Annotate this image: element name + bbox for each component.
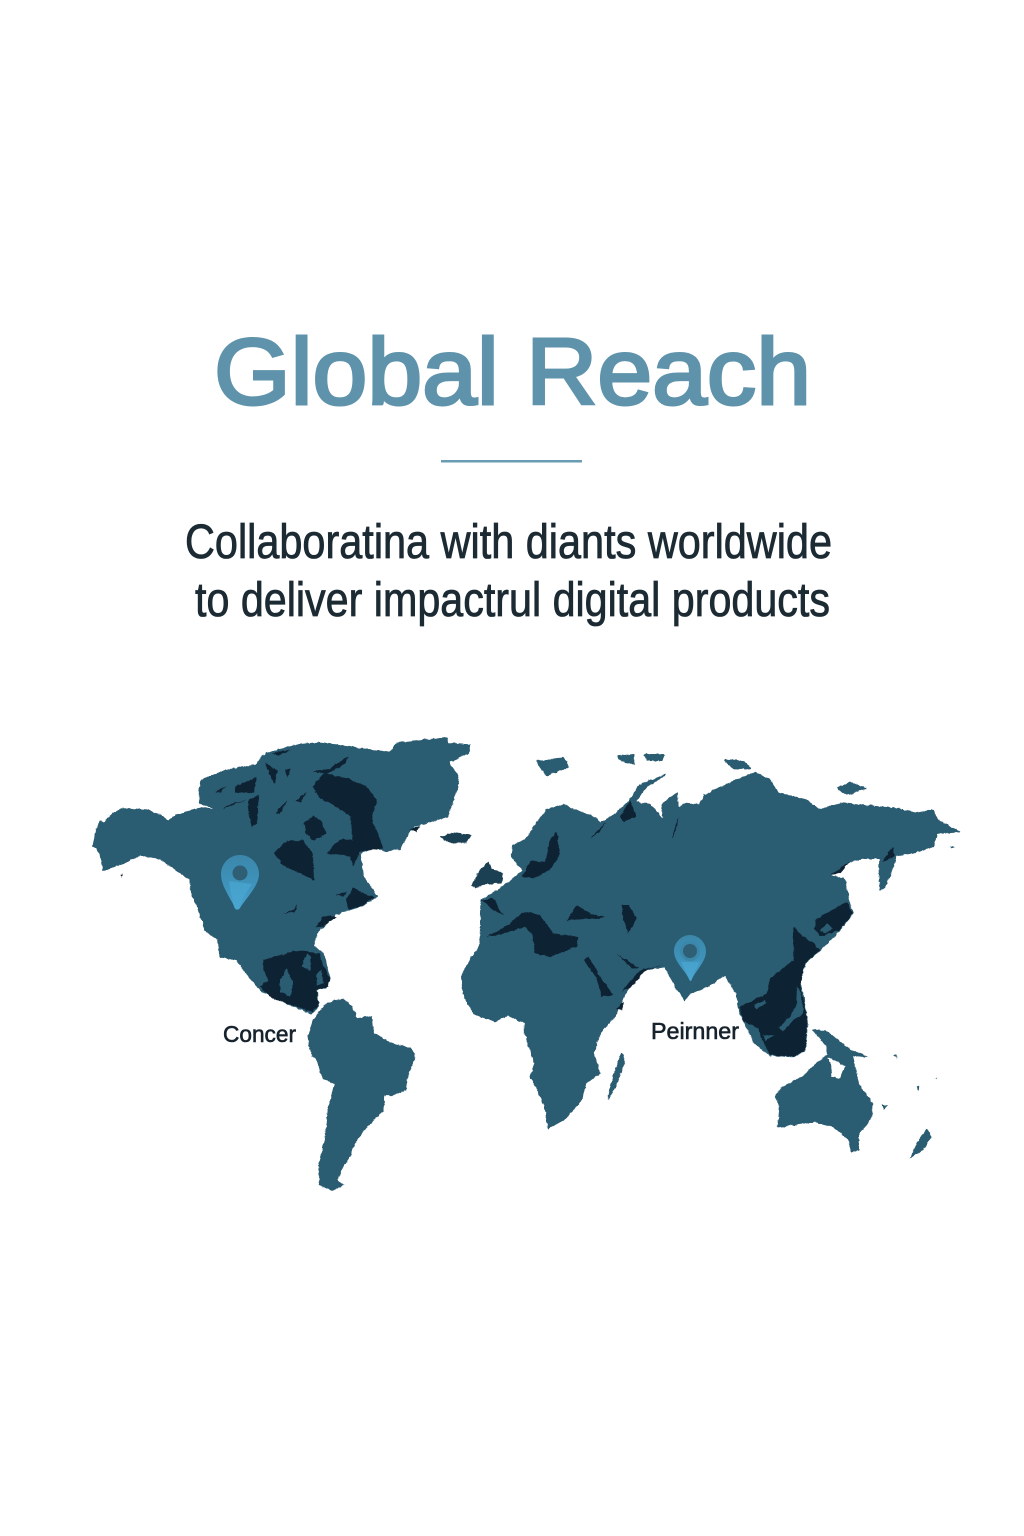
arctic islands [537, 755, 865, 794]
eurasia and africa [462, 773, 960, 1128]
alaska speckles [120, 873, 122, 877]
lighter patches [280, 953, 323, 997]
south america [308, 999, 415, 1190]
dark regions eurasia [482, 800, 895, 1057]
eurasia, africa and oceania [462, 755, 960, 1158]
world map [93, 738, 960, 1190]
label: Concer: Concer [223, 1021, 296, 1047]
australia and new guinea [775, 1030, 872, 1152]
new zealand [910, 1128, 932, 1158]
subtitle: to deliver impactrul digital products [195, 574, 830, 627]
madagascar [608, 1053, 624, 1098]
british isles [472, 861, 503, 888]
gulf cutout [827, 1058, 845, 1078]
icon: location pin north america [221, 855, 259, 910]
subtitle [185, 516, 832, 627]
title: Global Reach [214, 319, 811, 424]
pacific speckles [882, 847, 955, 1109]
title divider [441, 460, 582, 462]
north america [93, 738, 470, 1013]
lighter patches [753, 923, 833, 1041]
icon: location pin asia [674, 935, 706, 981]
subtitle: Collaboratina with diants worldwide [185, 516, 832, 569]
label: Peirnner: Peirnner [651, 1018, 739, 1044]
dark regions north america [215, 749, 419, 1012]
iceland [440, 833, 472, 843]
americas [93, 738, 472, 1190]
